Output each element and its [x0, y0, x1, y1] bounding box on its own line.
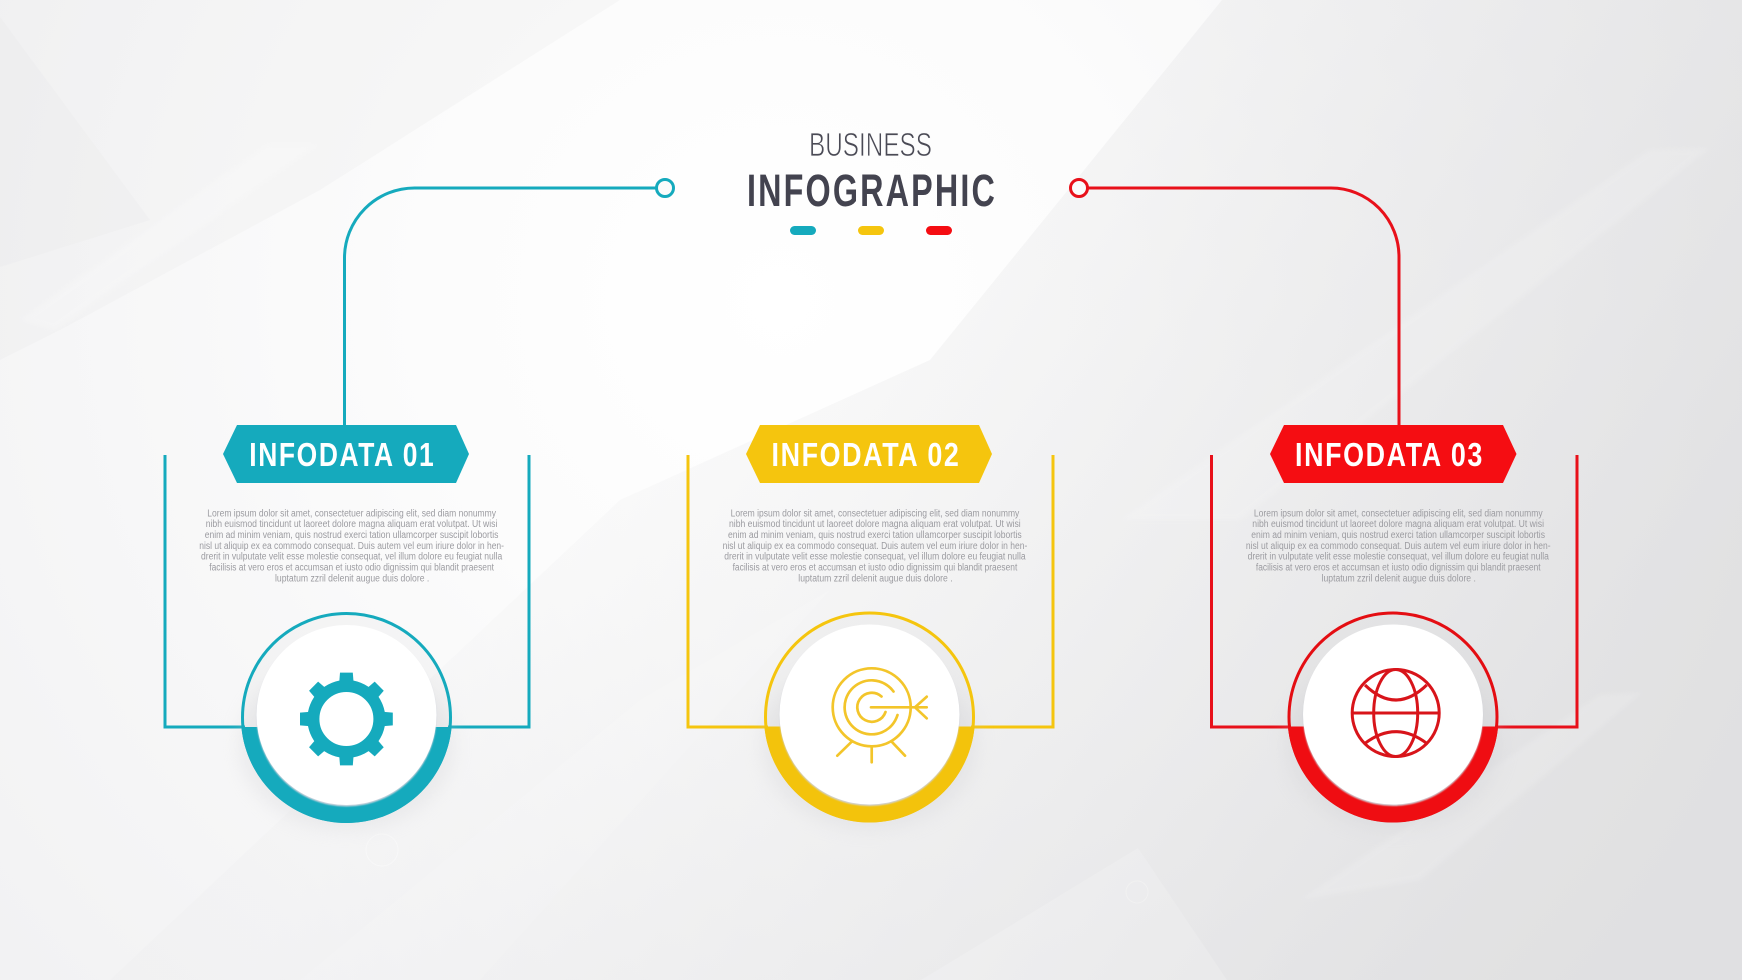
icon: target	[833, 668, 927, 762]
body text: drerit in vulputate velit esse molestie consequat, vel illum dolore eu feugiat nulla	[1248, 552, 1549, 563]
body text: enim ad minim veniam, quis nostrud exerci tation ullamcorper suscipit lobortis	[728, 530, 1022, 541]
body text: enim ad minim veniam, quis nostrud exerci tation ullamcorper suscipit lobortis	[1251, 530, 1545, 541]
body text: drerit in vulputate velit esse molestie consequat, vel illum dolore eu feugiat nulla	[201, 552, 503, 563]
badge: INFODATA 02	[772, 436, 960, 473]
colour pills	[790, 226, 952, 235]
body text: facilisis at vero eros et accumsan et iusto odio dignissim qui blandit praesent	[209, 563, 494, 574]
body text: luptatum zzril delenit augue duis dolore .	[275, 573, 429, 584]
bracket	[1212, 455, 1577, 727]
body text	[1246, 508, 1551, 584]
medallion	[762, 613, 978, 830]
title	[747, 126, 997, 235]
body text: drerit in vulputate velit esse molestie consequat, vel illum dolore eu feugiat nulla	[724, 552, 1026, 563]
icon: gear	[300, 673, 393, 765]
body text: Lorem ipsum dolor sit amet, consectetuer adipiscing elit, sed diam nonummy	[1254, 508, 1543, 519]
badge	[746, 425, 992, 483]
body text	[199, 508, 504, 584]
title line: infographic: INFOGRAPHIC	[747, 165, 997, 216]
medallion	[1285, 613, 1501, 830]
body text: luptatum zzril delenit augue duis dolore .	[798, 573, 953, 584]
panel: infodata 01	[165, 425, 529, 830]
panel: infodata 03	[1212, 425, 1577, 830]
body text: facilisis at vero eros et accumsan et iusto odio dignissim qui blandit praesent	[1256, 563, 1541, 574]
body text	[723, 508, 1027, 584]
badge	[223, 425, 469, 483]
bracket	[165, 455, 529, 727]
badge	[1270, 425, 1516, 483]
body text: facilisis at vero eros et accumsan et iusto odio dignissim qui blandit praesent	[733, 563, 1017, 574]
body text: Lorem ipsum dolor sit amet, consectetuer adipiscing elit, sed diam nonummy	[731, 508, 1019, 519]
title line: business: BUSINESS	[809, 126, 932, 163]
body text: enim ad minim veniam, quis nostrud exerci tation ullamcorper suscipit lobortis	[205, 530, 498, 541]
badge: INFODATA 03	[1295, 436, 1484, 473]
body text: nibh euismod tincidunt ut laoreet dolore magna aliquam erat volutpat. Ut wisi	[1252, 519, 1544, 530]
body text: nisl ut aliquip ex ea commodo consequat. Duis autem vel eum iriure dolor in hen-	[1246, 541, 1551, 552]
badge: INFODATA 01	[249, 436, 435, 473]
medallion	[238, 614, 454, 830]
body text: Lorem ipsum dolor sit amet, consectetuer adipiscing elit, sed diam nonummy	[207, 508, 496, 519]
body text: luptatum zzril delenit augue duis dolore .	[1322, 573, 1476, 584]
body text: nibh euismod tincidunt ut laoreet dolore magna aliquam erat volutpat. Ut wisi	[206, 519, 497, 530]
panel: infodata 02	[688, 425, 1053, 830]
body text: nibh euismod tincidunt ut laoreet dolore magna aliquam erat volutpat. Ut wisi	[729, 519, 1021, 530]
body text: nisl ut aliquip ex ea commodo consequat. Duis autem vel eum iriure dolor in hen-	[723, 541, 1027, 552]
connector: teal line to infodata 01	[344, 180, 674, 426]
icon: globe	[1352, 670, 1439, 756]
body text: nisl ut aliquip ex ea commodo consequat. Duis autem vel eum iriure dolor in hen-	[199, 541, 504, 552]
bracket	[688, 455, 1053, 727]
connector: red line to infodata 03	[1070, 180, 1399, 426]
